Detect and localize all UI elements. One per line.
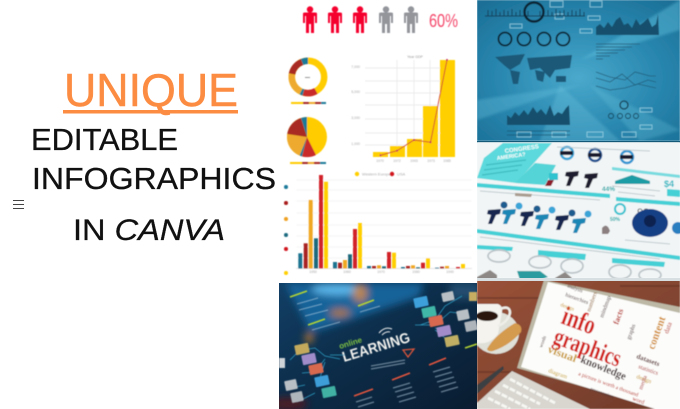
word cloud: numbers xyxy=(586,291,599,313)
heading: online learning: online xyxy=(338,335,364,351)
word cloud: media xyxy=(638,375,649,391)
panel: laptop word cloud photo xyxy=(473,280,680,409)
text: in canva: IN CANVA xyxy=(73,214,225,247)
capitol icon xyxy=(615,175,650,184)
pictogram row: 60 percent xyxy=(303,6,458,33)
stat text: $4 xyxy=(664,179,674,189)
combo chart: bars and line: 3,000 xyxy=(351,116,360,120)
divider strip: infographic bottom xyxy=(477,278,680,281)
chart legend xyxy=(355,172,406,176)
word cloud: knowledge xyxy=(579,354,628,383)
word cloud: info xyxy=(558,300,600,340)
pie legend xyxy=(290,162,326,164)
word cloud: presentation xyxy=(589,387,614,400)
word cloud: mindmap xyxy=(599,295,613,319)
stat text xyxy=(602,179,674,223)
pen xyxy=(477,366,504,394)
body text columns xyxy=(354,358,458,407)
panel: blue data dashboard xyxy=(477,0,680,141)
chart legend: Western Europe xyxy=(362,172,392,176)
teal rule bands xyxy=(477,167,680,267)
icon: triangle xyxy=(403,349,414,357)
word cloud: analysis xyxy=(566,284,583,294)
stat text: 44% xyxy=(602,186,615,193)
people row top xyxy=(545,147,633,188)
left legend dots xyxy=(284,185,288,275)
donut legend xyxy=(291,102,326,104)
teal title block: AMERICA? xyxy=(496,152,527,162)
keyboard xyxy=(477,371,590,409)
bottom gauges xyxy=(488,250,661,281)
heading: online learning: LEARNING xyxy=(340,330,412,366)
combo chart: bars and line: Year GDP xyxy=(407,55,423,59)
right icon tree xyxy=(413,291,478,347)
panel: teal infographic photo xyxy=(477,142,680,281)
combo chart: bars and line: 1,000 xyxy=(351,142,360,146)
six person row xyxy=(487,209,586,233)
floating frames xyxy=(510,1,652,137)
small bars bottom xyxy=(507,131,570,135)
portrait circle xyxy=(632,209,680,237)
text: infographics: INFOGRAPHICS xyxy=(32,161,276,196)
pictogram row: 60 percent: 60% xyxy=(429,11,458,31)
combo chart: bars and line: 1973 xyxy=(427,159,435,163)
ring gauges xyxy=(498,2,638,118)
combo chart: bars and line: 7,000 xyxy=(351,65,360,69)
word cloud: a picture is worth a thousand xyxy=(577,371,639,399)
text: editable: EDITABLE xyxy=(31,122,178,157)
grey text lines xyxy=(480,147,670,259)
word cloud: statistics xyxy=(637,364,659,377)
combo chart: bars and line: 1972 xyxy=(393,159,401,163)
croissant xyxy=(487,323,521,351)
map and building icons xyxy=(477,226,610,280)
pie chart xyxy=(287,117,327,157)
icon: hamburger menu xyxy=(13,200,24,208)
left icon tree xyxy=(279,343,345,403)
word cloud: graphs xyxy=(626,323,638,341)
stat text: 50% xyxy=(610,217,621,223)
word cloud: visual xyxy=(546,344,578,365)
panel: charts collage xyxy=(284,6,472,275)
divider strip: dashboard bottom xyxy=(477,141,680,142)
top barcode chart xyxy=(485,9,585,16)
word cloud: design xyxy=(635,374,652,385)
word cloud: word xyxy=(631,396,645,406)
text lines top page xyxy=(297,298,380,330)
word cloud: facts xyxy=(611,308,625,326)
word cloud: design xyxy=(559,302,575,313)
word cloud: datasets xyxy=(635,352,661,368)
skyline chart bottom xyxy=(507,105,570,125)
laptop body xyxy=(516,281,680,389)
word cloud: diagram xyxy=(547,368,568,381)
teal title block: CONGRESS xyxy=(504,144,539,155)
laptop screen xyxy=(521,282,680,409)
coffee cup xyxy=(476,304,510,343)
axis labels: 1980 xyxy=(412,270,420,274)
combo chart: bars and line: 1970 xyxy=(376,159,384,163)
word cloud: hierarchies xyxy=(564,292,589,306)
grouped bar chart xyxy=(284,172,472,275)
axis labels: 1950 xyxy=(309,270,317,274)
word cloud: graphics xyxy=(550,323,625,373)
word cloud: data xyxy=(662,320,674,335)
combo chart: bars and line: 1985 xyxy=(443,159,451,163)
chart legend: USA xyxy=(397,172,406,176)
line chart xyxy=(596,72,656,90)
word cloud xyxy=(539,284,674,406)
donut chart xyxy=(292,61,324,93)
combo chart: bars and line: 1993 xyxy=(410,159,418,163)
light rays xyxy=(477,0,680,141)
axis labels: 1960 xyxy=(343,270,351,274)
stat text: 93 xyxy=(637,207,649,219)
coffee saucer xyxy=(473,312,519,354)
word cloud: words xyxy=(539,335,548,349)
combo chart: bars and line: 5,000 xyxy=(351,90,360,94)
word cloud: content xyxy=(646,315,669,351)
axis labels: 1970 xyxy=(377,270,385,274)
lime accents xyxy=(290,291,477,348)
panel: online learning photo xyxy=(268,283,480,409)
world map xyxy=(495,54,572,84)
combo chart: bars and line xyxy=(351,55,455,163)
wood grain xyxy=(477,286,680,372)
heading: unique: UNIQUE xyxy=(64,64,238,116)
skyline chart top right xyxy=(596,14,659,35)
teal title block xyxy=(477,143,556,185)
blurred background page xyxy=(268,283,480,409)
title block xyxy=(31,64,276,247)
icon: wifi xyxy=(379,328,392,335)
axis labels: 1990 xyxy=(446,270,454,274)
badges row xyxy=(500,193,592,218)
small ring xyxy=(615,204,625,214)
axis labels xyxy=(309,270,454,274)
horizontal bars xyxy=(596,44,640,59)
